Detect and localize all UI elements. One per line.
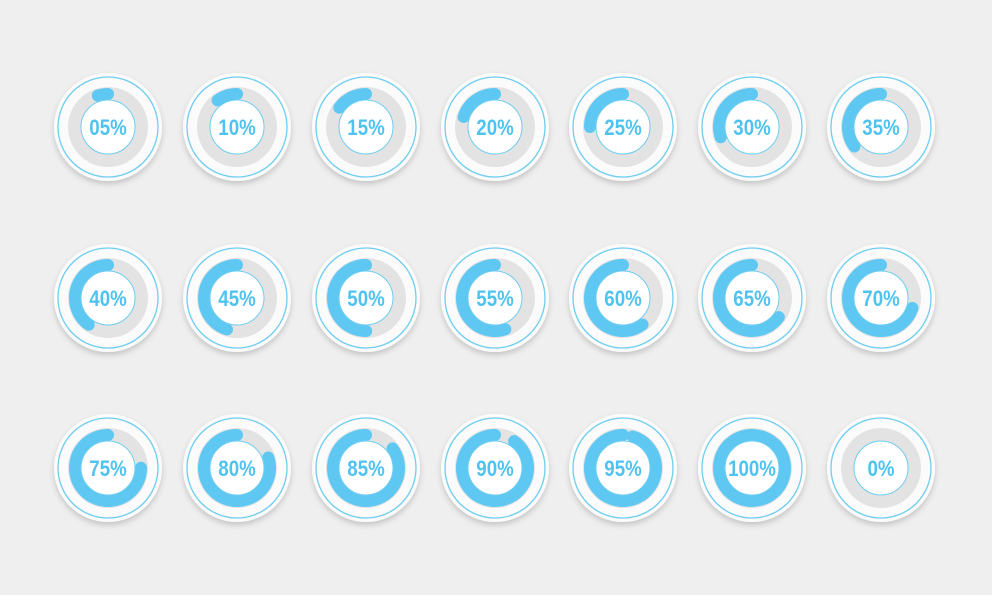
gauge 50%: [312, 244, 420, 352]
gauge 10%: 10%: [218, 117, 256, 140]
gauge 40%: 40%: [89, 288, 127, 311]
gauge 0%: 0%: [867, 458, 895, 481]
gauge 65%: [698, 244, 806, 352]
gauge 65%: 65%: [733, 288, 771, 311]
gauge 90%: 90%: [476, 458, 514, 481]
gauge 95%: [569, 414, 677, 522]
gauge 90%: [441, 414, 549, 522]
gauge 100%: [698, 414, 806, 522]
gauge 35%: 35%: [862, 117, 900, 140]
gauge 45%: [183, 244, 291, 352]
gauge 55%: 55%: [476, 288, 514, 311]
gauge 60%: [569, 244, 677, 352]
gauge 25%: 25%: [604, 117, 642, 140]
gauge 80%: [183, 414, 291, 522]
gauge 25%: [569, 73, 677, 181]
gauge 95%: 95%: [604, 458, 642, 481]
gauge 05%: 05%: [89, 117, 127, 140]
gauge 30%: 30%: [733, 117, 771, 140]
gauge 100%: 100%: [728, 458, 776, 481]
gauge 85%: 85%: [347, 458, 385, 481]
gauge 70%: 70%: [862, 288, 900, 311]
gauge 05%: [54, 73, 162, 181]
gauge 40%: [54, 244, 162, 352]
gauge 85%: [312, 414, 420, 522]
gauge 60%: 60%: [604, 288, 642, 311]
gauge 70%: [827, 244, 935, 352]
gauge 55%: [441, 244, 549, 352]
gauge 75%: [54, 414, 162, 522]
gauge 45%: 45%: [218, 288, 256, 311]
gauge 75%: 75%: [89, 458, 127, 481]
gauge 15%: [312, 73, 420, 181]
gauge 30%: [698, 73, 806, 181]
gauge 80%: 80%: [218, 458, 256, 481]
gauge 0%: [827, 414, 935, 522]
gauge 15%: 15%: [347, 117, 385, 140]
gauge 20%: [441, 73, 549, 181]
gauge 20%: 20%: [476, 117, 514, 140]
gauge 10%: [183, 73, 291, 181]
gauge 35%: [827, 73, 935, 181]
gauge 50%: 50%: [347, 288, 385, 311]
